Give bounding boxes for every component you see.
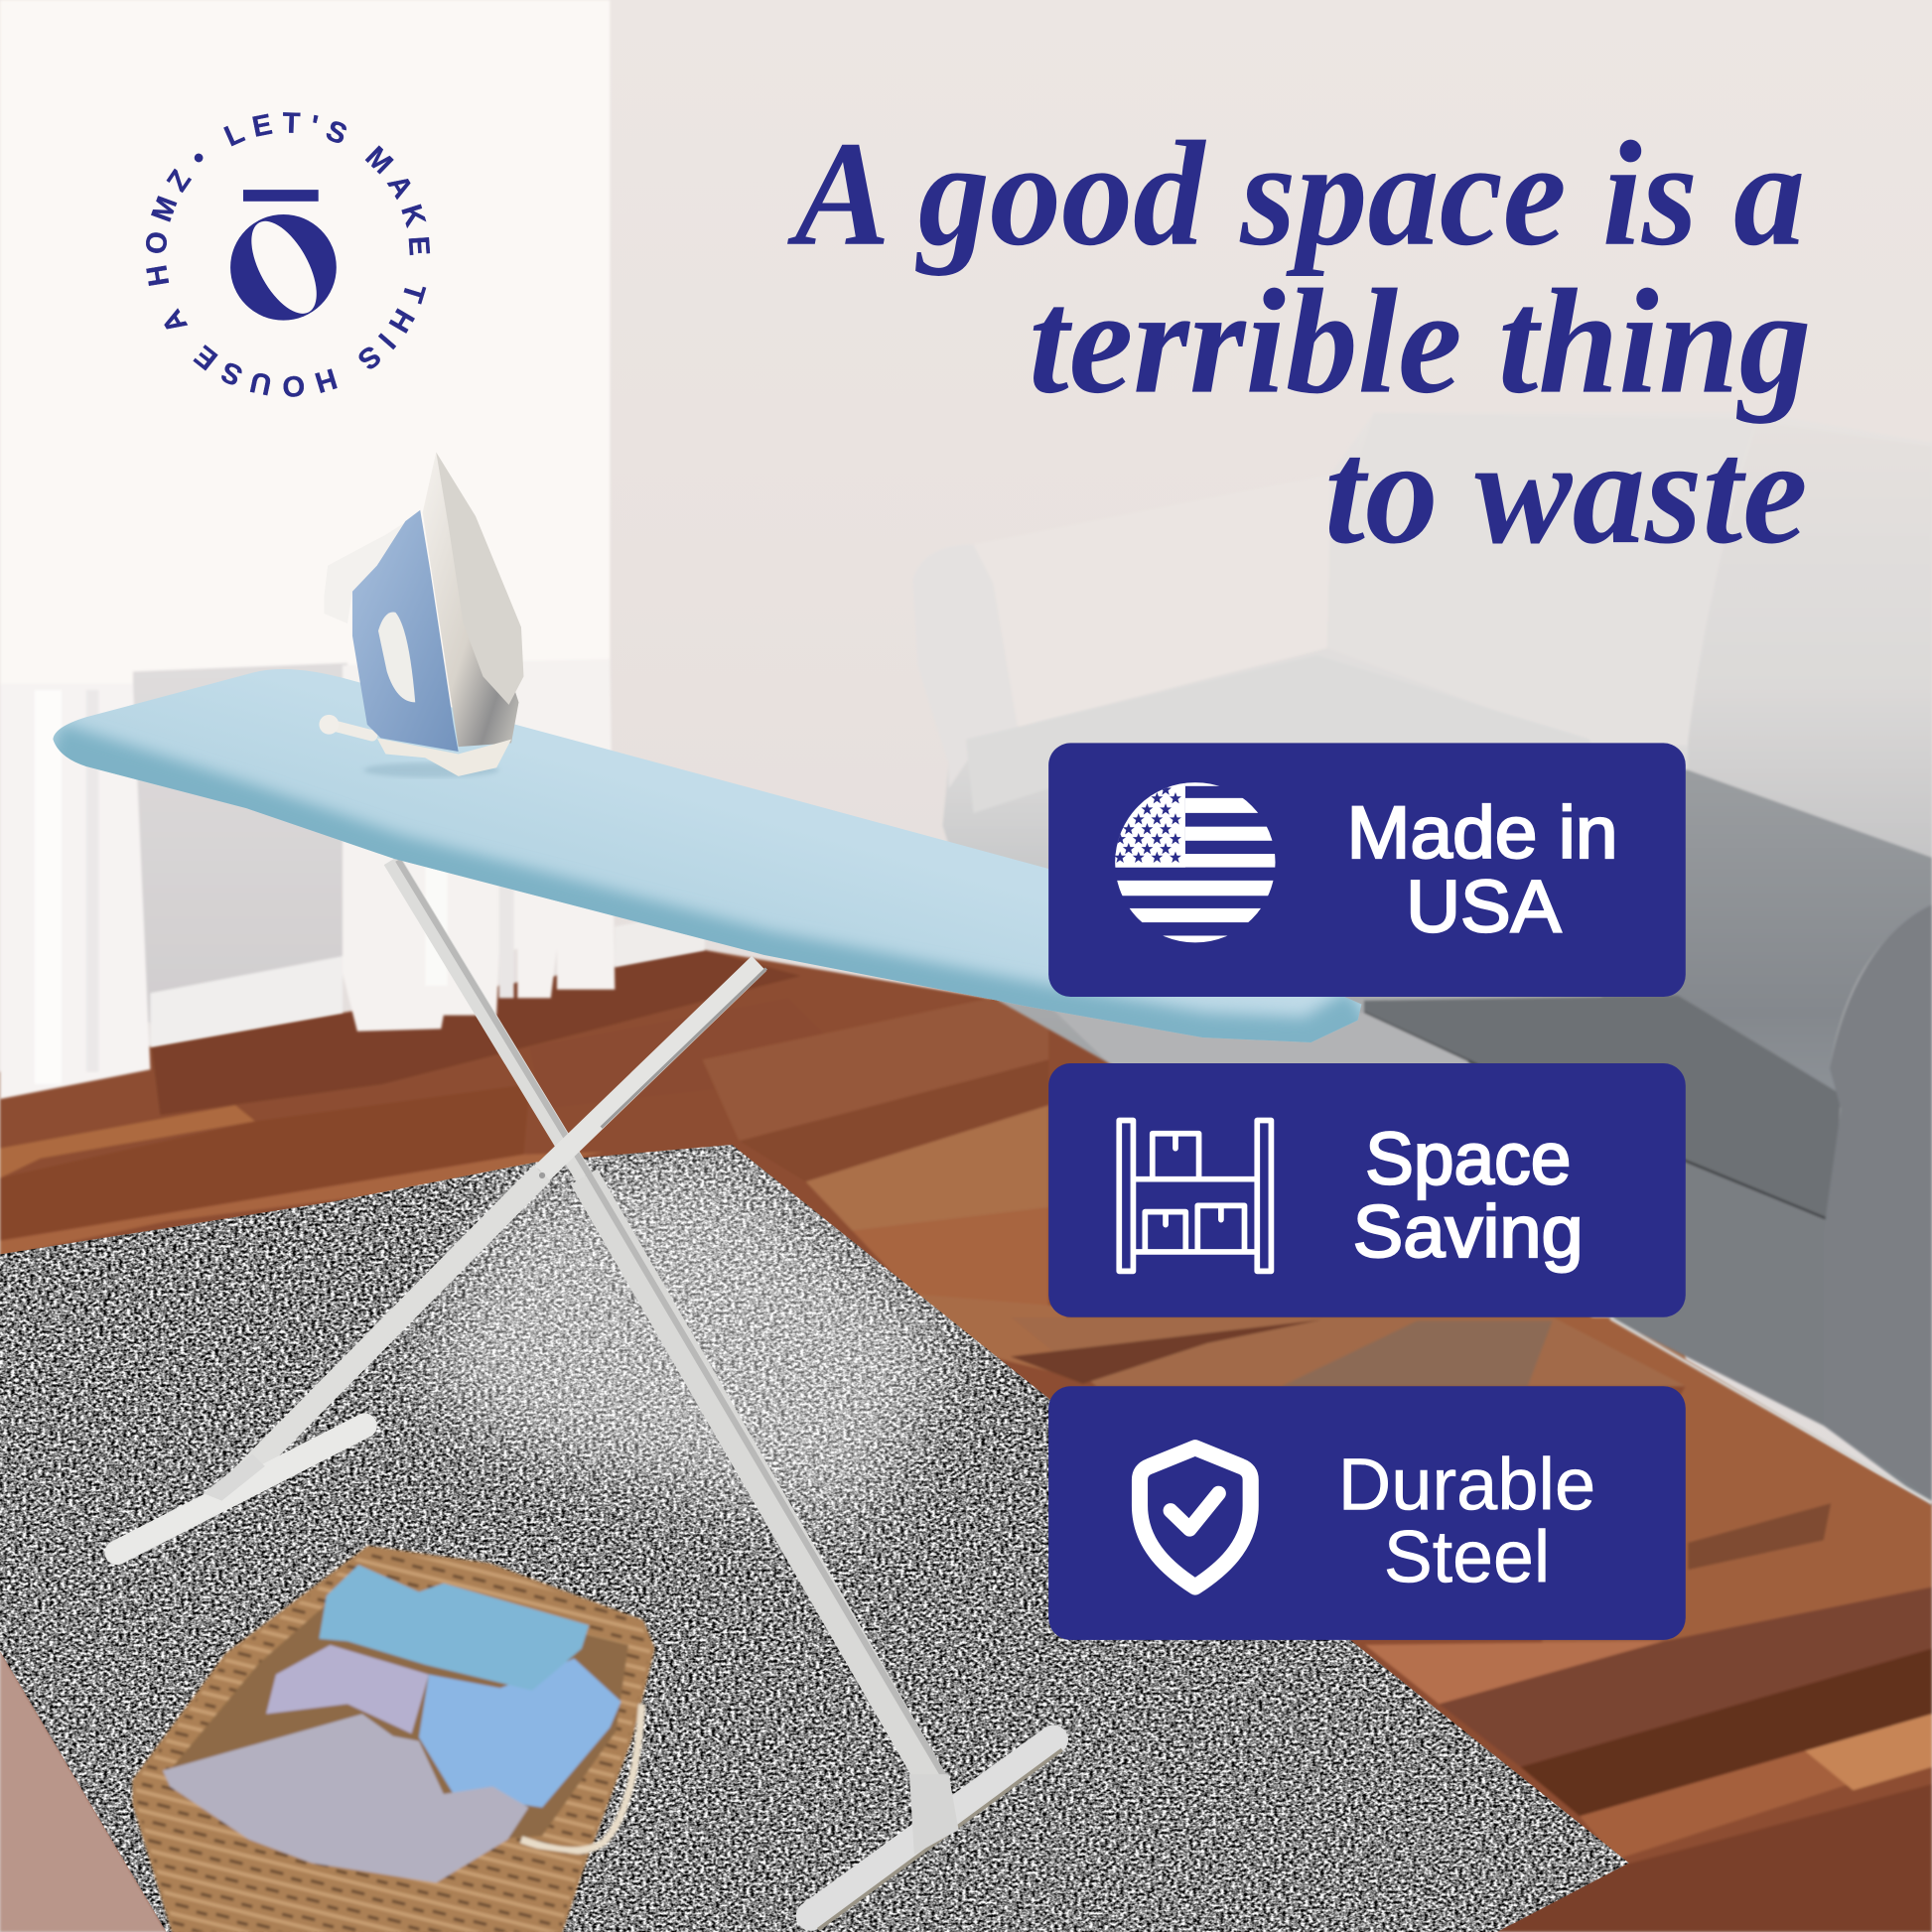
text: durable steel: Durable [1338,1443,1595,1525]
text: made in usa: Made in [1346,791,1618,874]
icon: us flag circle [1114,782,1278,945]
illustration: ironing board top [53,669,1361,1042]
text: durable steel [1338,1443,1595,1598]
title: A good space is a [787,110,1805,277]
title: terrible thing [1029,258,1811,425]
panel: durable steel [1048,1386,1686,1640]
background: window curtains [0,0,705,1099]
text: space saving [1353,1118,1584,1273]
text: made in usa: USA [1406,865,1562,947]
illustration: laundry basket with clothes [134,1548,653,1932]
text: durable steel: Steel [1384,1516,1550,1598]
title [787,110,1811,575]
logo: circular slogan text: • LET'S MAKE THIS HOUSE A HOMZ [146,112,431,397]
icon: shield with check [1140,1448,1251,1587]
illustration: steam iron [319,452,523,777]
icon: storage shelves with boxes [1119,1121,1271,1271]
background: wood floor [0,950,1932,1932]
logo: macron bar [243,190,319,202]
background: grey shag carpet [0,1145,1629,1932]
panel: made in usa [1048,743,1686,997]
text: space saving: Saving [1353,1190,1584,1273]
logo: letter o mark [230,211,337,324]
illustration: ironing board legs [117,860,1062,1930]
text: made in usa [1346,791,1618,947]
title: to waste [1324,408,1808,575]
panel: space saving [1048,1063,1686,1317]
background: sofa [913,413,1932,1506]
logo: circular badge [146,112,431,397]
text: space saving: Space [1365,1118,1571,1200]
